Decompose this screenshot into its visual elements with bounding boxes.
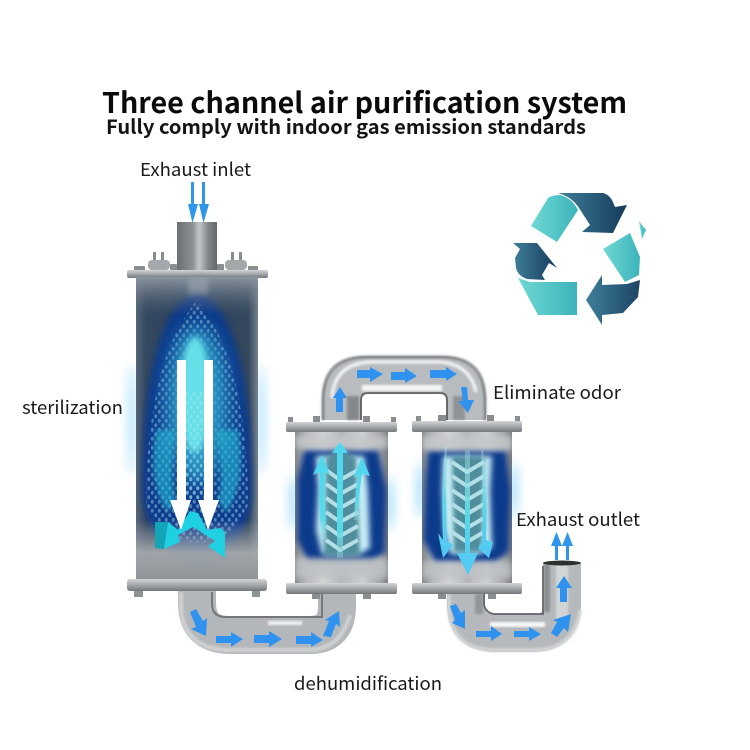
up arrows <box>313 442 370 558</box>
core <box>295 436 388 578</box>
bottom nuts <box>134 591 260 597</box>
arrows: outlet <box>551 532 573 560</box>
cyan splitting arrows <box>155 511 225 558</box>
top flange <box>127 270 268 278</box>
arrows: inlet <box>188 182 209 223</box>
top flange <box>286 422 397 432</box>
glow <box>417 462 517 518</box>
label: sterilization: sterilization <box>22 394 123 420</box>
body <box>295 432 388 584</box>
flange nuts <box>416 415 520 599</box>
pipe: bottom left U-bend <box>181 590 350 650</box>
bottom flange <box>286 583 397 594</box>
core <box>422 436 512 578</box>
pipe: top arch <box>323 357 485 420</box>
flange nuts <box>288 416 396 599</box>
subtitle: Fully comply with indoor gas emission standards <box>106 111 586 140</box>
pipe: bottom right U-bend <box>449 560 581 650</box>
icon: recycling symbol <box>513 193 646 325</box>
inlet pipe <box>177 222 217 272</box>
label: exhaust inlet: Exhaust inlet <box>140 156 251 182</box>
title: Three channel air purification system <box>102 81 627 122</box>
glow <box>290 475 393 531</box>
body <box>422 432 512 584</box>
panel: sterilization cylinder <box>127 222 268 597</box>
panel: dehumidification cylinder <box>286 416 397 599</box>
glow <box>128 365 265 475</box>
down arrows <box>438 445 493 575</box>
cylinder body <box>136 277 258 580</box>
bottom flange <box>127 579 267 591</box>
panel: odor removal cylinder <box>412 415 522 599</box>
label: dehumidification: dehumidification <box>294 670 442 696</box>
label: eliminate odor: Eliminate odor <box>493 379 622 405</box>
top bolts <box>134 252 258 271</box>
label: exhaust outlet: Exhaust outlet <box>516 506 640 532</box>
white down arrows <box>170 360 219 530</box>
arrows: bottom left flow <box>190 609 340 647</box>
top flange <box>412 421 522 432</box>
arrows: bottom right flow <box>450 576 572 641</box>
arrows: top arch flow <box>333 367 474 413</box>
bottom flange <box>412 583 522 594</box>
